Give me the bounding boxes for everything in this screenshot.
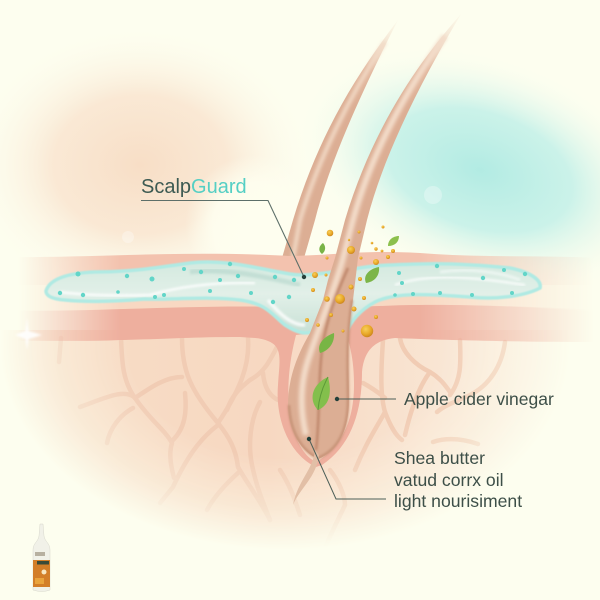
dermis with vessels <box>18 330 528 538</box>
epidermis upper band <box>30 252 574 311</box>
leaf at bulb <box>313 377 330 410</box>
label: Apple cider vinegar: Apple cider vinegar <box>404 389 554 409</box>
gel teal dots <box>58 262 527 304</box>
product bottle <box>33 524 50 592</box>
label: Shea butter: Shea butter <box>394 448 485 468</box>
label: ScalpGuard <box>141 176 306 279</box>
leaves <box>313 236 399 410</box>
light peach layer <box>58 296 527 310</box>
left strand highlight <box>302 36 445 435</box>
leaf small upper left <box>319 243 325 254</box>
bulb edge shading <box>289 300 352 458</box>
label: ScalpGuard: ScalpGuard <box>141 176 247 198</box>
leaf at follicle neck <box>319 333 334 353</box>
label: Shea butter: light nourisiment <box>394 491 522 511</box>
back hair shaft <box>282 20 398 258</box>
leaf small upper right <box>388 236 399 246</box>
label: Apple cider vinegar <box>335 389 554 409</box>
skin band layers <box>0 252 600 467</box>
front hair shaft and bulb <box>288 14 461 459</box>
hair shaft divider <box>316 268 348 450</box>
sparkle <box>15 318 42 350</box>
leaf on gel <box>365 267 379 283</box>
hair follicle outer sheath light <box>288 330 354 462</box>
label: Shea butter <box>307 437 522 511</box>
label: Shea butter: vatud corrx oil <box>394 470 504 490</box>
hair root <box>293 450 319 505</box>
oil droplets <box>305 226 395 337</box>
dark pink layer <box>0 305 600 467</box>
gel layer <box>46 262 540 333</box>
